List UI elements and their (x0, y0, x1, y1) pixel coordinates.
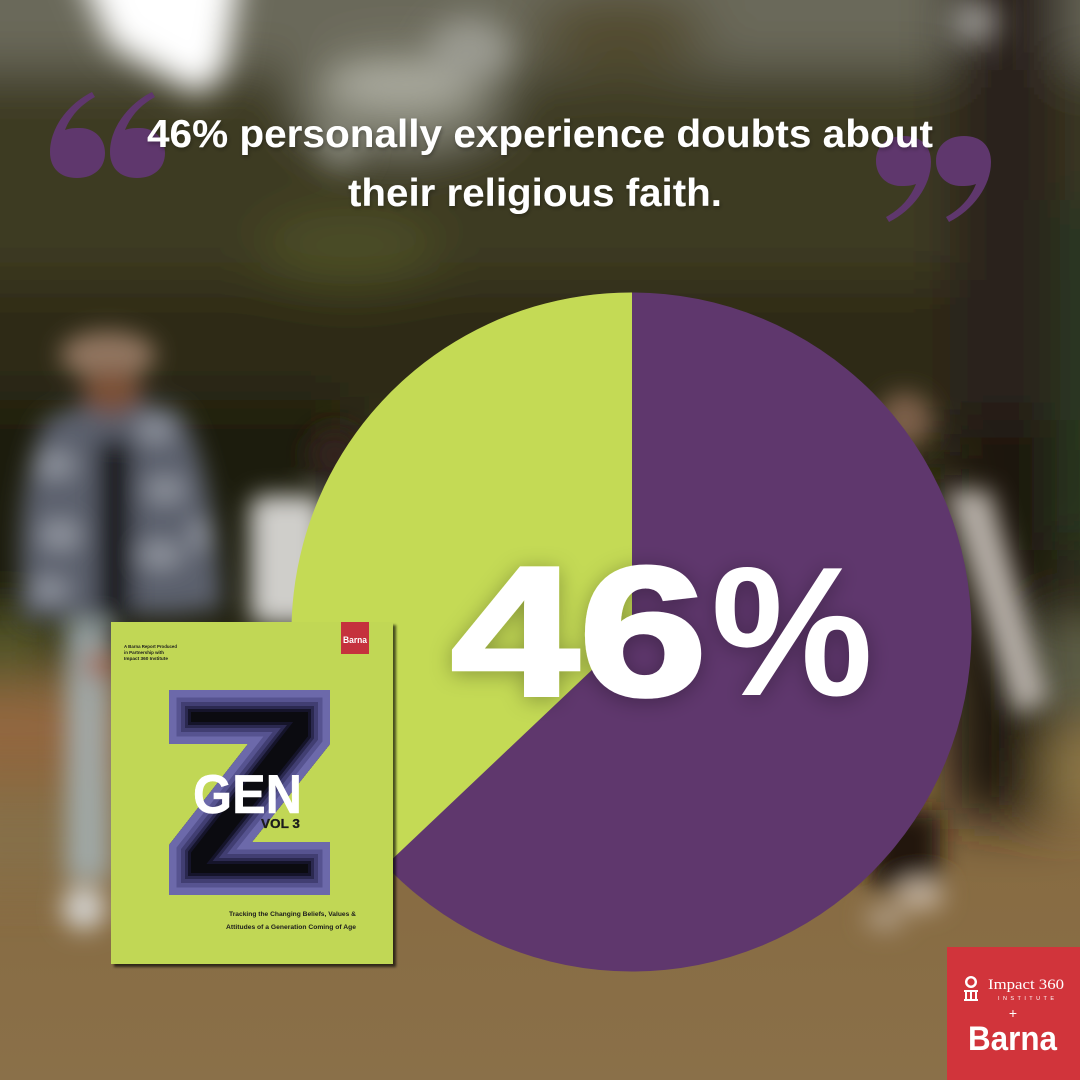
GEN wordmark: GEN (193, 763, 302, 825)
cover small print: A Barna Report Produced (124, 644, 177, 649)
Impact 360 wordmark: Impact 360 (988, 977, 1064, 993)
cover small print (124, 644, 177, 661)
Barna badge on cover: Barna (343, 635, 368, 646)
cover small print: Impact 360 Institute (124, 656, 168, 661)
headline quote: their religious faith. (348, 172, 722, 215)
cover subtitle: Tracking the Changing Beliefs, Values & (229, 911, 356, 918)
headline quote: 46% personally experience doubts about (147, 113, 933, 156)
cover subtitle (226, 911, 356, 931)
quote mark: opening (50, 92, 165, 178)
Barna badge on cover (341, 622, 369, 654)
plus sign: + (1009, 1005, 1017, 1021)
book cover: Gen Z Vol 3 (111, 622, 393, 964)
logo block: Impact 360 Institute + Barna (947, 947, 1080, 1080)
pie chart (291, 292, 972, 972)
icon: Impact 360 column (964, 977, 978, 1000)
cover small print: in Partnership with (124, 650, 164, 655)
cover subtitle: Attitudes of a Generation Coming of Age (226, 924, 356, 931)
Institute label: INSTITUTE (998, 996, 1054, 1002)
headline quote (147, 113, 933, 215)
VOL 3 label: VOL 3 (261, 816, 300, 831)
big percentage: 46 (451, 528, 707, 734)
quote mark: closing (876, 136, 991, 222)
big percentage: % (711, 528, 873, 734)
layered Z artwork (169, 690, 330, 895)
Barna wordmark: Barna (968, 1020, 1058, 1058)
